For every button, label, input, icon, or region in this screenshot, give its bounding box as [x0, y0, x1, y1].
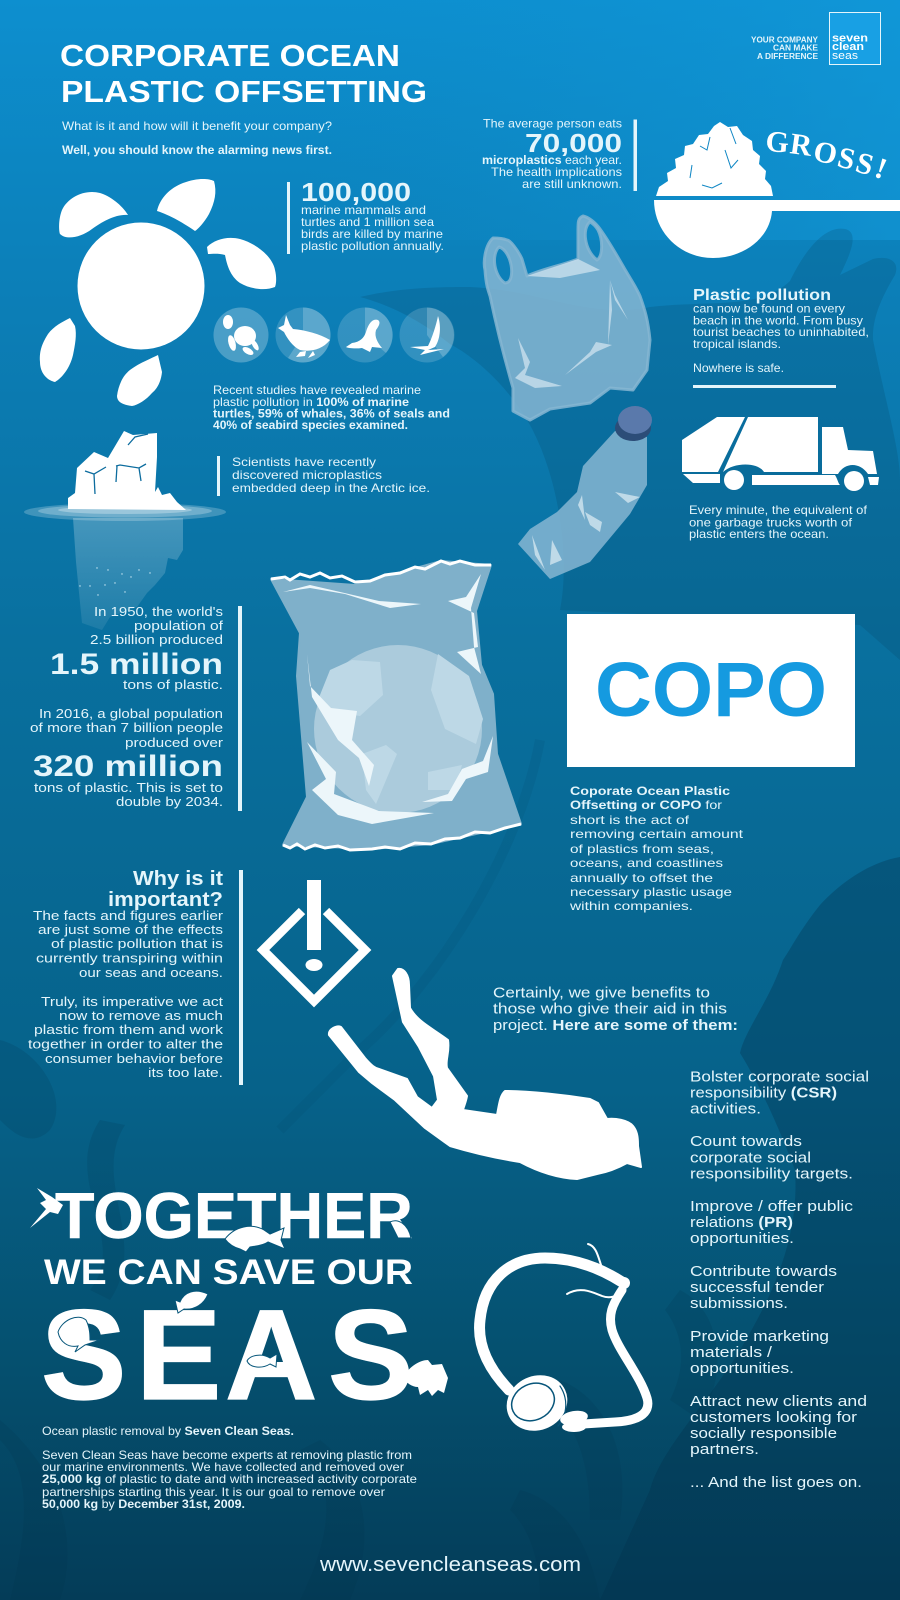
text: benefits intro: those who give their aid in this: [493, 1002, 727, 1018]
logo block: [751, 12, 880, 64]
subtitle: [62, 119, 332, 157]
text: arctic microplastics: [217, 455, 430, 496]
list: benefits: socially responsible: [690, 1426, 837, 1442]
stat: 70,000 microplastics: The health implications: [491, 165, 622, 179]
logo block: seven: [832, 32, 868, 44]
text: why is it important: important?: [108, 889, 223, 911]
icon: fish group: [30, 1188, 448, 1396]
text: why is it important: Why is it: [133, 868, 223, 890]
text: why is it important: of plastic pollution that is: [51, 936, 224, 951]
text: COPO definition: within companies.: [569, 899, 693, 913]
icon: whale circle: [276, 307, 331, 362]
text: species percentages: [213, 383, 450, 432]
icon: warning diamond: [263, 880, 365, 1001]
list: benefits: Count towards: [690, 1134, 802, 1150]
stat: 70,000 microplastics: The average person eats: [483, 117, 622, 131]
stat: 100,000: 100,000: [301, 177, 411, 207]
text: COPO box: [567, 614, 855, 767]
text: why is it important: [28, 868, 243, 1085]
text: ocean plastic removal: [42, 1424, 417, 1511]
logo block: A DIFFERENCE: [757, 52, 819, 61]
text: plastic pollution: Nowhere is safe.: [693, 361, 784, 375]
text: why is it important: consumer behavior before: [45, 1051, 223, 1066]
text: species percentages: Recent studies have revealed marine: [213, 383, 421, 397]
logo block: CAN MAKE: [773, 44, 819, 53]
list: benefits: corporate social: [690, 1150, 811, 1166]
stat: 100,000: [287, 177, 444, 254]
heading: together we can save our seas: TOGETHER: [55, 1179, 413, 1252]
text: plastic production stats: 1.5 million: [50, 648, 223, 681]
text: plastic production stats: 320 million: [33, 750, 223, 783]
text: arctic microplastics: Scientists have recently: [232, 455, 376, 469]
background silhouette: upper sea creature: [360, 229, 900, 660]
icon: plastic bag: [484, 216, 650, 420]
text: plastic pollution: beach in the world. From busy: [693, 314, 863, 328]
title: [60, 38, 427, 109]
subtitle: What is it and how will it benefit your company?: [62, 119, 332, 133]
text: COPO definition: oceans, and coastlines: [570, 856, 723, 870]
text: garbage truck fact: [689, 503, 868, 541]
title: CORPORATE OCEAN: [60, 38, 400, 73]
text: plastic pollution: tourist beaches to uninhabited,: [693, 325, 869, 339]
list: benefits: opportunities.: [690, 1361, 794, 1377]
text: garbage truck fact: Every minute, the equivalent of: [689, 503, 868, 517]
icon: snorkel mask: [480, 1244, 648, 1441]
stat: 100,000: marine mammals and: [301, 203, 426, 217]
text: benefits intro: [493, 986, 738, 1034]
text: plastic production stats: double by 2034.: [116, 794, 223, 809]
icon: seabird circle: [400, 308, 454, 362]
text: why is it important: currently transpiring within: [36, 950, 223, 966]
background seaweed and hands: [0, 1040, 717, 1600]
text: species percentages: 40% of seabird species examined.: [213, 418, 408, 432]
stat: 70,000 microplastics: 70,000: [525, 128, 622, 158]
list: benefits: Improve / offer public: [690, 1199, 853, 1215]
text: COPO box: COPO: [595, 647, 827, 733]
text: garbage truck fact: one garbage trucks worth of: [689, 516, 853, 530]
stat: 70,000 microplastics: are still unknown.: [522, 177, 622, 191]
text: plastic production stats: of more than 7 billion people: [30, 720, 223, 735]
text: COPO definition: Offsetting or COPO for: [570, 798, 722, 812]
list: benefits: Contribute towards: [690, 1264, 837, 1280]
heading: together we can save our seas: WE CAN SAVE OUR: [44, 1253, 413, 1292]
text: why is it important: its too late.: [148, 1065, 223, 1080]
text: ocean plastic removal: Ocean plastic removal by Seven Clean Seas.: [42, 1424, 294, 1438]
text: plastic production stats: produced over: [125, 735, 224, 750]
stat: 100,000: birds are killed by marine: [301, 227, 443, 241]
text: ocean plastic removal: Seven Clean Seas have become experts at removing plastic from: [42, 1448, 412, 1462]
stat: 70,000 microplastics: microplastics each year.: [482, 153, 622, 167]
text: why is it important: our seas and oceans.: [79, 965, 223, 980]
text: why is it important: Truly, its imperative we act: [41, 994, 223, 1009]
list: benefits: relations (PR): [690, 1215, 793, 1231]
text: plastic production stats: In 2016, a global population: [39, 706, 223, 721]
text: COPO definition: annually to offset the: [570, 871, 713, 885]
list: benefits: Provide marketing: [690, 1329, 829, 1345]
text: ocean plastic removal: our marine environments. We have collected and removed over: [42, 1460, 404, 1474]
text: COPO definition: short is the act of: [570, 813, 690, 827]
text: COPO definition: Coporate Ocean Plastic: [570, 784, 730, 798]
text: species percentages: turtles, 59% of whales, 36% of seals and: [213, 406, 450, 420]
list: benefits: Bolster corporate social: [690, 1069, 869, 1085]
icon: garbage truck: [682, 417, 879, 491]
text: arctic microplastics: embedded deep in the Arctic ice.: [232, 481, 430, 495]
icon: plastic bottle: [518, 406, 652, 579]
text: benefits intro: Certainly, we give benefits to: [493, 986, 710, 1002]
list: benefits: Attract new clients and: [690, 1394, 867, 1410]
list: benefits: responsibility targets.: [690, 1167, 853, 1183]
list: benefits: partners.: [690, 1442, 759, 1458]
background arc: [280, 740, 540, 1130]
text: arctic microplastics: discovered microplastics: [232, 468, 382, 482]
text: COPO definition: removing certain amount: [570, 827, 744, 841]
heading: together we can save our seas: [41, 1179, 413, 1427]
logo block: clean: [832, 41, 864, 53]
title: PLASTIC OFFSETTING: [61, 74, 427, 109]
text: plastic production stats: tons of plastic.: [123, 677, 223, 692]
text: why is it important: together in order to alter the: [28, 1036, 223, 1052]
text: benefits intro: project. Here are some of them:: [493, 1018, 738, 1034]
text: plastic production stats: In 1950, the world's: [94, 604, 224, 619]
icon: iceberg: [24, 431, 226, 630]
text: website: www.sevencleanseas.com: [319, 1554, 581, 1576]
icon: scuba diver: [329, 969, 641, 1179]
text: why is it important: plastic from them and work: [34, 1022, 224, 1037]
list: benefits: opportunities.: [690, 1231, 794, 1247]
text: plastic pollution: tropical islands.: [693, 337, 781, 351]
text: plastic pollution: [693, 287, 869, 388]
icon: scoop of microplastics: [654, 122, 900, 258]
text: COPO definition: necessary plastic usage: [570, 885, 732, 899]
logo block: YOUR COMPANY: [751, 36, 819, 44]
icon: turtle: [40, 179, 276, 406]
stat: 100,000: plastic pollution annually.: [301, 239, 444, 253]
text: why is it important: The facts and figures earlier: [33, 908, 224, 923]
background silhouette: lower right shape: [600, 857, 900, 1600]
list: benefits: activities.: [690, 1102, 761, 1118]
icon: seal circle: [338, 307, 393, 362]
text: plastic pollution: Plastic pollution: [693, 287, 831, 304]
list: benefits: submissions.: [690, 1296, 788, 1312]
text: why is it important: now to remove as much: [59, 1008, 223, 1023]
icon: turtle circle: [214, 308, 268, 362]
list: benefits: responsibility (CSR): [690, 1086, 837, 1102]
list: benefits: [690, 1069, 869, 1491]
text: why is it important: are just some of the effects: [38, 922, 224, 937]
text: plastic production stats: [30, 604, 242, 811]
stat: 70,000 microplastics: [482, 117, 637, 191]
icon row: species circles: [214, 307, 454, 362]
list: benefits: ... And the list goes on.: [690, 1475, 862, 1491]
text: COPO definition: of plastics from seas,: [570, 842, 714, 856]
text: garbage truck fact: plastic enters the ocean.: [689, 527, 829, 541]
text: COPO definition: [569, 784, 744, 913]
text: species percentages: plastic pollution in 100% of marine: [213, 395, 409, 409]
subtitle: Well, you should know the alarming news first.: [62, 143, 332, 157]
heading: together we can save our seas: SEAS: [41, 1284, 413, 1427]
logo block: seas: [832, 50, 859, 62]
list: benefits: customers looking for: [690, 1410, 857, 1426]
text: plastic production stats: population of: [134, 618, 223, 633]
text: ocean plastic removal: 50,000 kg by December 31st, 2009.: [42, 1497, 245, 1511]
text: plastic production stats: 2.5 billion produced: [90, 632, 223, 647]
list: benefits: materials /: [690, 1345, 773, 1361]
text: ocean plastic removal: partnerships starting this year. It is our goal to remove over: [42, 1485, 385, 1499]
text: GROSS!: GROSS!: [765, 125, 891, 186]
icon: crisp packet with earth: [271, 561, 521, 850]
text: ocean plastic removal: 25,000 kg of plastic to date and with increased activity corporate: [42, 1472, 417, 1486]
list: benefits: successful tender: [690, 1280, 824, 1296]
text: plastic production stats: tons of plastic. This is set to: [34, 780, 223, 795]
stat: 100,000: turtles and 1 million sea: [301, 215, 434, 229]
text: plastic pollution: can now be found on every: [693, 302, 845, 316]
